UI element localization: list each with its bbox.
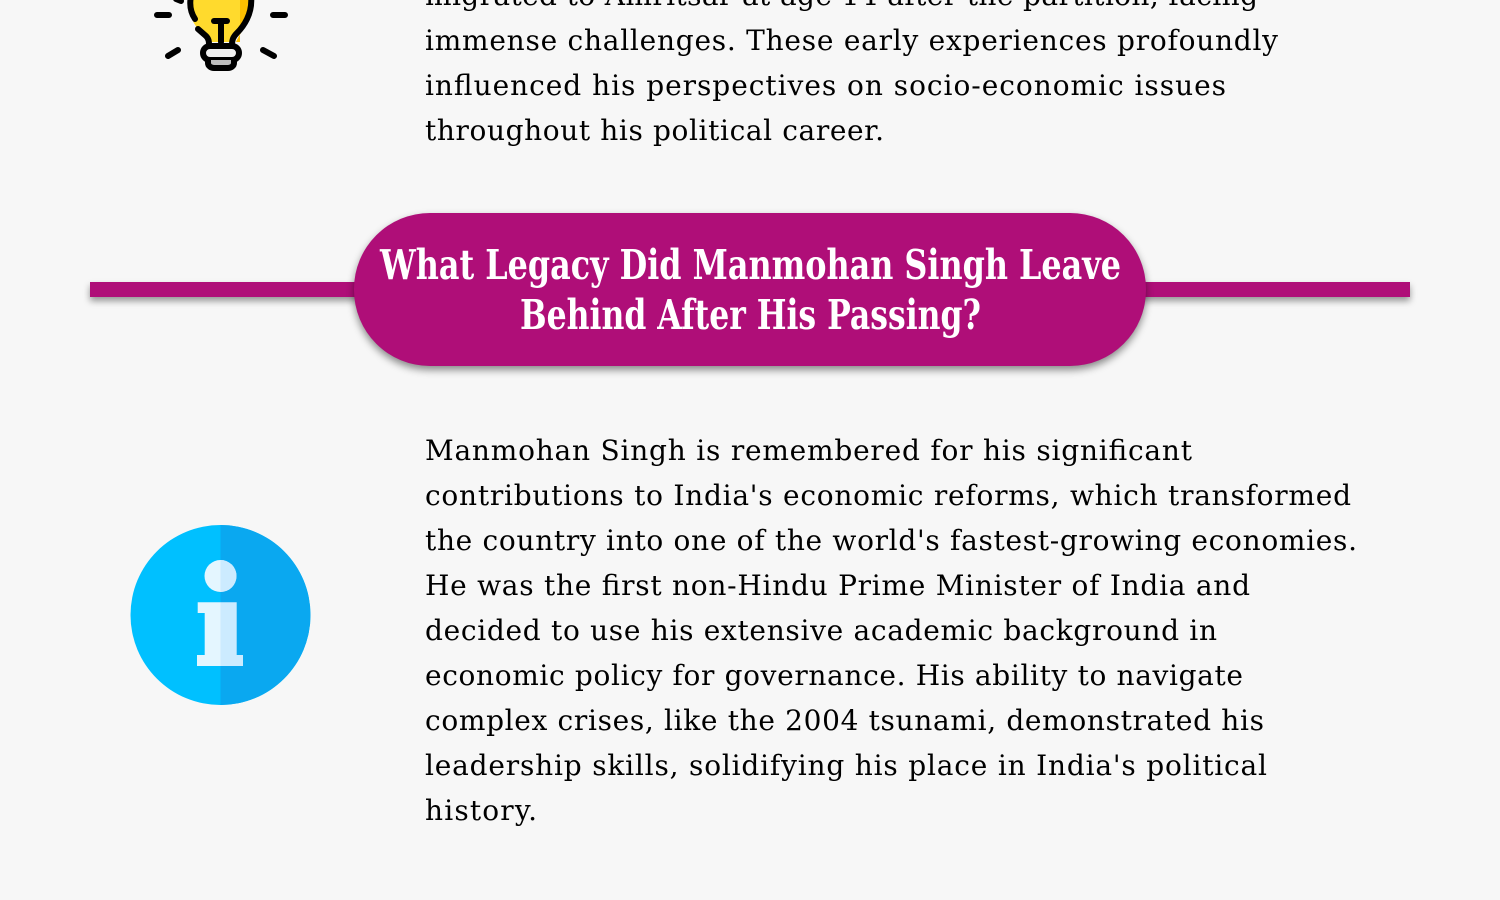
text block: early life paragraph: immense challenges. These early experiences profoundly: [425, 24, 1278, 57]
text block: legacy paragraph: decided to use his extensive academic background in: [425, 614, 1217, 647]
text block: legacy paragraph: economic policy for governance. His ability to navigate: [425, 659, 1243, 692]
text block: legacy paragraph: leadership skills, solidifying his place in India's political: [425, 749, 1267, 782]
icon: information circle: [130, 525, 310, 705]
text block: legacy paragraph: He was the first non-Hindu Prime Minister of India and: [425, 569, 1250, 602]
text block: legacy paragraph: complex crises, like the 2004 tsunami, demonstrated his: [425, 704, 1264, 737]
text block: legacy paragraph: Manmohan Singh is remembered for his significant: [425, 434, 1193, 467]
heading: legacy question pill: Behind After His Passing?: [520, 291, 981, 339]
text block: early life paragraph: throughout his political career.: [425, 114, 884, 147]
heading: legacy question pill: [354, 213, 1146, 366]
heading: legacy question pill: What Legacy Did Manmohan Singh Leave: [379, 241, 1121, 289]
text block: legacy paragraph: contributions to India's economic reforms, which transformed: [425, 479, 1351, 512]
text block: early life paragraph: [425, 0, 1278, 147]
icon: light bulb: [154, 0, 288, 71]
text block: legacy paragraph: history.: [425, 794, 537, 827]
text block: legacy paragraph: [425, 434, 1357, 827]
text block: legacy paragraph: the country into one of the world's fastest-growing economies.: [425, 524, 1357, 557]
text block: early life paragraph: influenced his perspectives on socio-economic issues: [425, 69, 1226, 102]
divider line behind heading: [90, 282, 1410, 297]
